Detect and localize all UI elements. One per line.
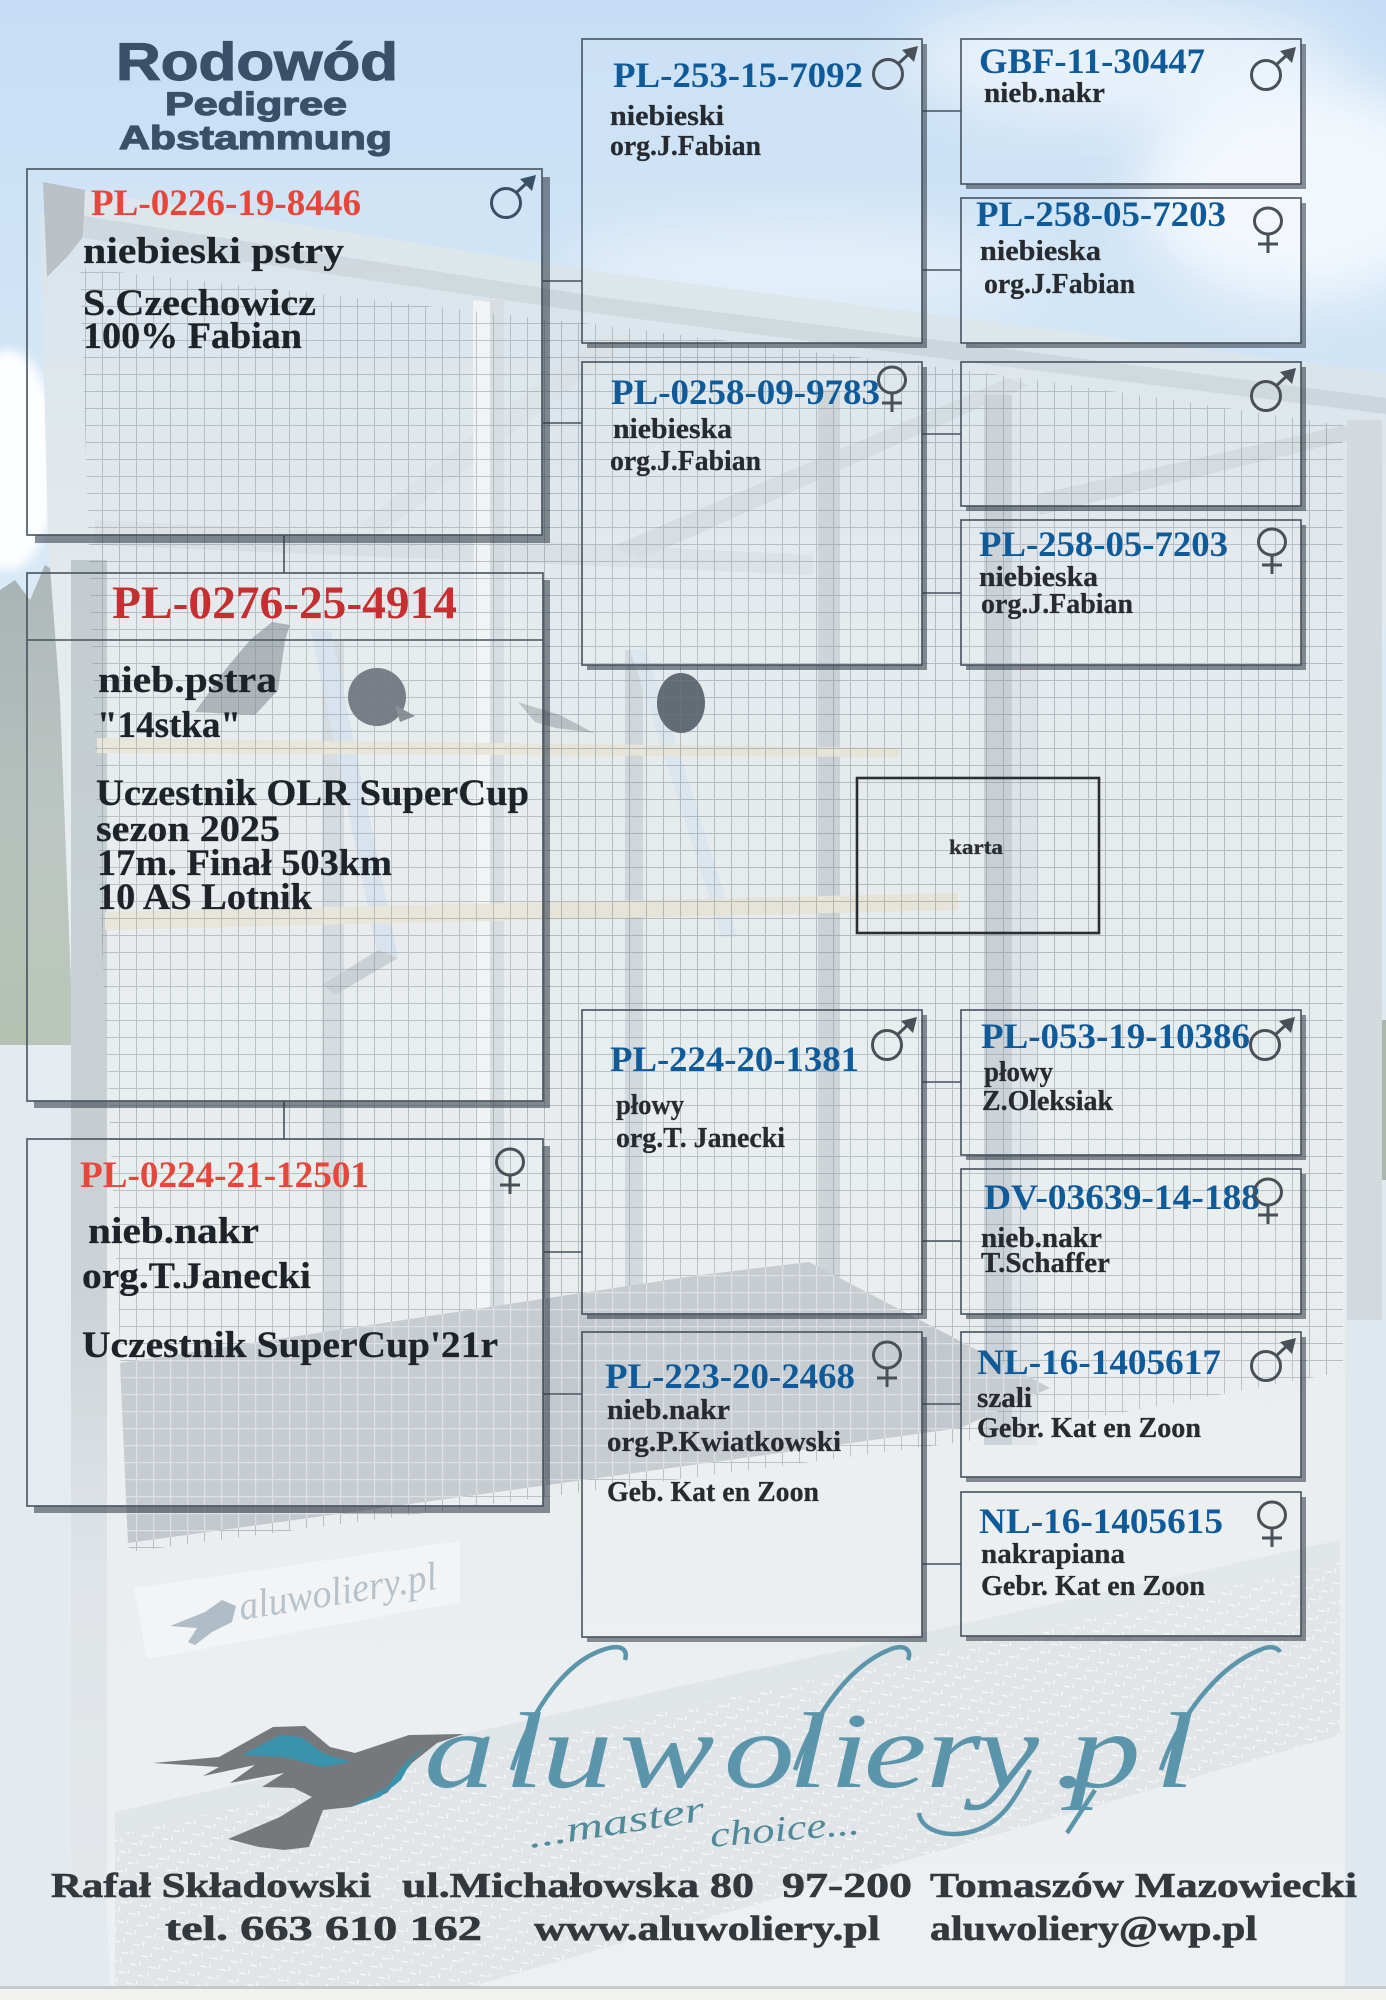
footer: contact details: Tomaszów Mazowiecki [930, 1866, 1357, 1905]
icon: bird [153, 1726, 464, 1850]
panel: PL-258-05-7203 upper [961, 194, 1306, 348]
footer: contact details: ul.Michałowska 80 [402, 1866, 754, 1905]
panel: main pigeon [27, 573, 550, 1108]
icon: male [1252, 47, 1296, 90]
footer: contact details: tel. 663 610 162 [165, 1909, 482, 1948]
footer: contact details: 97-200 [782, 1866, 912, 1905]
icon: male [1252, 368, 1296, 410]
panel: main pigeon: sezon 2025 [96, 809, 280, 850]
panel: mother: Uczestnik SuperCup'21r [82, 1325, 498, 1366]
panel: NL-16-1405617: Gebr. Kat en Zoon [977, 1413, 1201, 1444]
panel: main pigeon: nieb.pstra [98, 660, 277, 701]
panel: PL-253-15-7092: org.J.Fabian [610, 131, 761, 162]
icon: female [1258, 529, 1286, 574]
logo: aluwoliery.pl: choice... [708, 1802, 861, 1855]
panel: mother: org.T.Janecki [82, 1256, 311, 1297]
panel: main pigeon: 10 AS Lotnik [97, 877, 312, 918]
panel: PL-223-20-2468: Geb. Kat en Zoon [607, 1477, 819, 1508]
icon: female [878, 367, 906, 412]
sign watermark on the aviary panel [170, 1553, 440, 1645]
panel: PL-223-20-2468: nieb.nakr [607, 1395, 730, 1426]
panel: main pigeon: 17m. Finał 503km [97, 843, 392, 884]
icon: male [874, 46, 918, 88]
icon: female [1254, 1179, 1282, 1224]
sign watermark on the aviary panel: aluwoliery.pl [235, 1553, 440, 1629]
panel: PL-0258-09-9783: niebieska [613, 414, 732, 445]
icon: male [872, 1017, 917, 1060]
icon: male [492, 175, 536, 218]
panel: father: PL-0226-19-8446 [91, 183, 361, 224]
panel: NL-16-1405615: nakrapiana [981, 1539, 1125, 1570]
footer: contact details: Rafał Składowski [51, 1866, 371, 1905]
panel: PL-224-20-1381 [582, 1010, 927, 1319]
panel: PL-253-15-7092: niebieski [610, 101, 724, 132]
panel: PL-223-20-2468: org.P.Kwiatkowski [607, 1427, 841, 1458]
icon: male [1252, 1338, 1296, 1380]
icon: female [1254, 208, 1282, 253]
panel: main pigeon: "14stka" [97, 705, 241, 746]
panel: PL-053-19-10386: PL-053-19-10386 [981, 1016, 1250, 1056]
panel: father: 100% Fabian [83, 316, 302, 357]
panel: PL-258-05-7203 lower: PL-258-05-7203 [979, 524, 1228, 564]
logo: aluwoliery.pl [153, 1647, 1280, 1856]
panel: NL-16-1405615: Gebr. Kat en Zoon [981, 1571, 1205, 1602]
icon: female [1258, 1502, 1286, 1547]
logo: aluwoliery.pl: aluwoliery.pl [424, 1691, 1195, 1811]
panel: DV-03639-14-188: nieb.nakr [981, 1223, 1102, 1254]
panel: NL-16-1405615 [961, 1492, 1306, 1641]
footer: contact details: aluwoliery@wp.pl [930, 1909, 1257, 1948]
title: Abstammung [119, 119, 392, 156]
panel: father [27, 169, 550, 543]
panel: PL-0258-09-9783: org.J.Fabian [610, 446, 761, 477]
panel: PL-258-05-7203 upper: org.J.Fabian [984, 269, 1135, 300]
panel: PL-223-20-2468 [582, 1332, 927, 1642]
panel: DV-03639-14-188: DV-03639-14-188 [984, 1177, 1260, 1217]
panel: DV-03639-14-188: T.Schaffer [981, 1248, 1110, 1279]
panel: PL-258-05-7203 lower: org.J.Fabian [981, 589, 1133, 620]
panel: PL-053-19-10386 [961, 1010, 1306, 1160]
panel: mother: nieb.nakr [88, 1211, 259, 1252]
panel: karta: karta [949, 835, 1004, 859]
panel: mother [27, 1139, 550, 1513]
panel: PL-0258-09-9783 [582, 362, 927, 670]
footer: contact details: www.aluwoliery.pl [534, 1909, 880, 1948]
panel: GBF-11-30447: GBF-11-30447 [979, 41, 1205, 81]
pedigree connector lines [284, 111, 961, 1564]
title: Pedigree [165, 86, 347, 122]
panel: PL-053-19-10386: płowy [984, 1057, 1053, 1088]
icon: female [874, 1342, 900, 1387]
panel: NL-16-1405617: NL-16-1405617 [977, 1342, 1221, 1382]
panel: PL-258-05-7203 upper: niebieska [980, 236, 1101, 267]
panel: main pigeon: Uczestnik OLR SuperCup [96, 773, 529, 814]
panel: NL-16-1405617 [961, 1332, 1306, 1482]
panel: mother: PL-0224-21-12501 [80, 1155, 369, 1196]
panel: PL-253-15-7092: PL-253-15-7092 [613, 55, 863, 95]
panel: GBF-11-30447: nieb.nakr [984, 78, 1105, 109]
title [116, 33, 398, 156]
logo: aluwoliery.pl: ...master [525, 1788, 708, 1856]
panel: father: niebieski pstry [83, 231, 345, 272]
icon: female [496, 1149, 524, 1194]
panel: PL-253-15-7092 [582, 39, 927, 348]
panel: PL-0258-09-9783: PL-0258-09-9783 [611, 372, 880, 412]
panel: PL-223-20-2468: PL-223-20-2468 [605, 1356, 855, 1396]
panel: PL-224-20-1381: PL-224-20-1381 [610, 1039, 859, 1079]
icon: male [1250, 1017, 1295, 1060]
footer: contact details [51, 1866, 1357, 1948]
title: Rodowód [116, 33, 398, 92]
panel: NL-16-1405615: NL-16-1405615 [979, 1501, 1223, 1541]
panel: DV-03639-14-188 [961, 1169, 1306, 1319]
panel: PL-224-20-1381: org.T. Janecki [616, 1123, 785, 1154]
panel: PL-258-05-7203 upper: PL-258-05-7203 [976, 194, 1226, 234]
panel: GBF-11-30447 [961, 39, 1306, 189]
panel: father: S.Czechowicz [83, 283, 316, 324]
panel: PL-258-05-7203 lower: niebieska [979, 562, 1098, 593]
panel: karta [857, 778, 1099, 933]
panel: PL-224-20-1381: płowy [616, 1090, 684, 1121]
panel: empty male [961, 362, 1306, 511]
panel: NL-16-1405617: szali [977, 1383, 1032, 1414]
panel: PL-258-05-7203 lower [961, 520, 1306, 670]
panel: main pigeon: PL-0276-25-4914 [112, 577, 457, 629]
panel: PL-053-19-10386: Z.Oleksiak [982, 1086, 1113, 1117]
